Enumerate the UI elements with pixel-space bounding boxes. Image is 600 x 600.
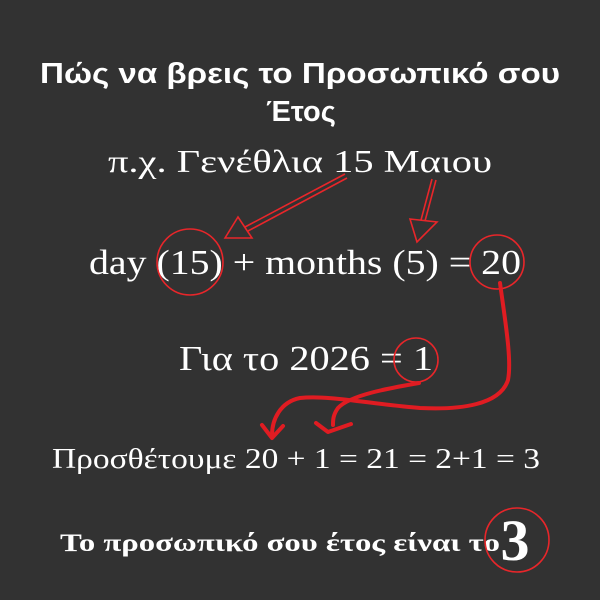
sum line: Προσθέτουμε 20 + 1 = 21 = 2+1 = 3 bbox=[52, 443, 540, 475]
result line: 3 bbox=[500, 508, 530, 573]
arrow: day bbox=[225, 174, 347, 238]
arrow: month bbox=[410, 179, 437, 242]
title bbox=[40, 58, 560, 128]
circle: 15 bbox=[157, 229, 223, 295]
arrow: 20 to sum bbox=[262, 283, 509, 438]
arrow: 1 to sum bbox=[316, 383, 419, 432]
title: Έτος bbox=[266, 96, 336, 128]
circle: 20 bbox=[470, 235, 524, 289]
result line bbox=[60, 508, 549, 573]
example text: π.χ. Γενέθλια 15 Μαιου bbox=[108, 143, 492, 179]
circle: 1 bbox=[394, 338, 438, 382]
equation: day + month: day (15) + months (5) = 20 bbox=[89, 243, 521, 282]
equation: year: Για το 2026 = 1 bbox=[179, 339, 433, 378]
result line: Το προσωπικό σου έτος είναι το bbox=[60, 530, 500, 557]
title: Πώς να βρεις το Προσωπικό σου bbox=[40, 58, 560, 90]
